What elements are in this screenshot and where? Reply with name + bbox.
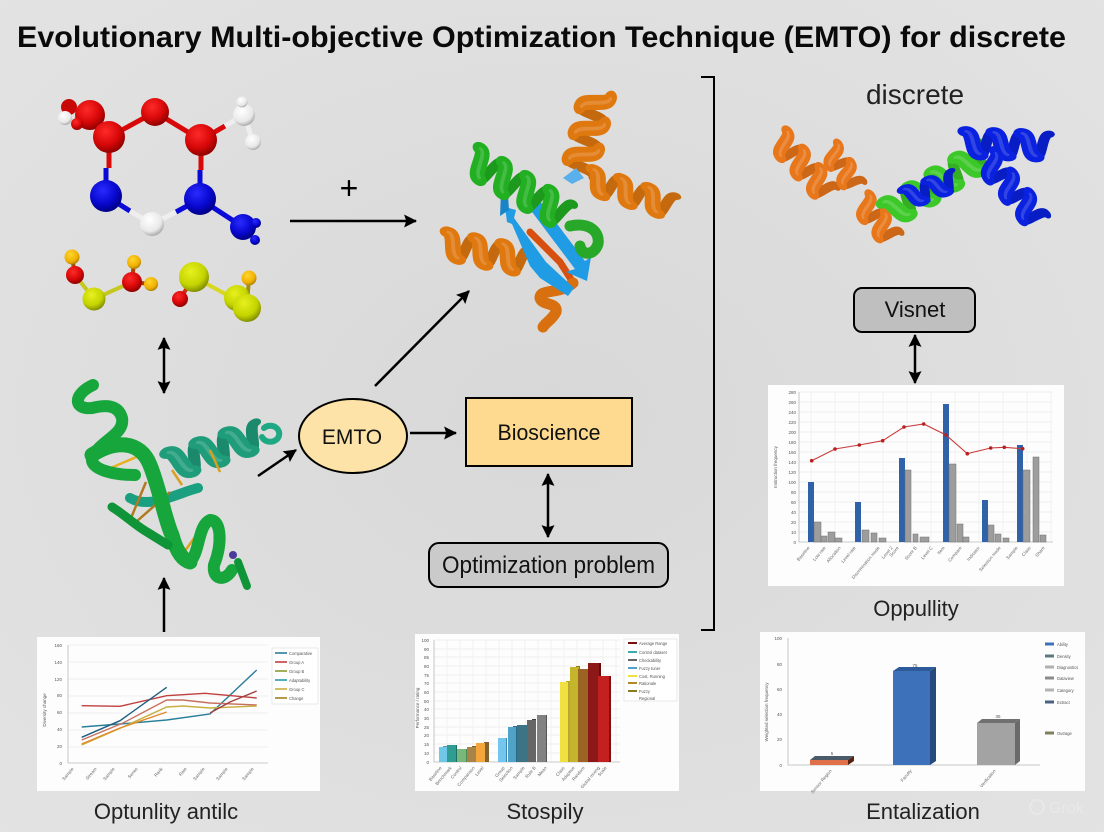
watermark: Grok (1030, 800, 1085, 817)
x axis labels: Item (936, 545, 946, 555)
legend: Outrage (1057, 731, 1073, 736)
bar: orange (810, 751, 854, 765)
y axis labels: 70 (424, 681, 429, 686)
x axis labels: Allocation (825, 545, 842, 564)
legend: Regional (639, 696, 655, 701)
y axis labels: 260 (788, 400, 796, 405)
panel: bar and line chart (768, 385, 1064, 586)
x axis labels: Score B (904, 545, 918, 561)
small molecule: yellow red pair (64, 250, 261, 322)
y axis labels: 60 (791, 500, 796, 505)
arrow: dna to EMTO (258, 450, 296, 476)
x axis labels (428, 765, 608, 790)
y axis labels: 75 (424, 673, 429, 678)
legend: Fuzzy (639, 689, 651, 694)
green helix end loop (570, 225, 598, 253)
double arrow: molecules to dna (163, 338, 165, 393)
EMTO node: EMTO (322, 426, 382, 449)
y axis labels: 120 (788, 470, 796, 475)
orange helix three (854, 195, 901, 245)
y axis labels: 90 (424, 647, 429, 652)
y axis labels: 10 (791, 530, 796, 535)
orange helix right (587, 169, 676, 217)
x axis labels: Control (450, 765, 463, 780)
y axis labels (788, 390, 796, 545)
x axis labels: Level (474, 765, 485, 777)
x axis labels: Sample (1005, 545, 1019, 560)
x axis labels: Faculty (900, 768, 913, 783)
caption: Stospily: Stospily (506, 799, 584, 824)
x axis labels: Class (1021, 545, 1032, 557)
plus sign: + (340, 170, 358, 206)
bioscience box (466, 398, 632, 466)
legend: Adaptability (289, 678, 311, 683)
blue arrow strands (500, 168, 591, 296)
x axis labels: Class (555, 765, 566, 777)
legend: Comparative (289, 651, 313, 656)
legend: Fuzzy tuner (639, 666, 661, 671)
y axis labels: 20 (57, 744, 62, 749)
bar: blue (893, 663, 936, 765)
panel: line chart (37, 637, 320, 791)
x axis labels: Level rate (840, 545, 857, 564)
y axis labels: 40 (791, 510, 796, 515)
EMTO node (299, 399, 407, 473)
series lines (82, 670, 257, 745)
legend: Group A (289, 660, 304, 665)
x axis labels: Group (494, 765, 506, 778)
x axis labels: Score (888, 545, 900, 558)
legend: Dataview (1057, 676, 1074, 681)
y axis labels: 180 (788, 440, 796, 445)
panel: 3D three-bar chart (760, 632, 1085, 794)
x axis labels: Baseline (428, 765, 443, 782)
legend: Extract (1057, 700, 1071, 705)
x axis labels: Sensor Region (810, 768, 833, 794)
x axis labels: Low rate (812, 545, 827, 562)
y axis labels: 85 (424, 655, 429, 660)
y axis labels: 100 (774, 636, 782, 641)
bar: orange: 5 (831, 751, 834, 756)
y axis labels: 60 (777, 687, 782, 692)
legend: Checkability (639, 658, 662, 663)
legend: Category (1057, 688, 1075, 693)
y axis labels (774, 636, 782, 768)
green helix (466, 148, 573, 228)
y axis labels: 20 (424, 733, 429, 738)
y axis labels: 120 (54, 677, 62, 682)
y axis labels: 240 (788, 410, 796, 415)
y axis labels: 15 (424, 742, 429, 747)
blue helix top (965, 131, 1049, 158)
orange helix top right (565, 92, 611, 176)
blue helix middle (904, 171, 957, 207)
x axis labels: Series (127, 766, 139, 779)
legend: Group B (289, 669, 305, 674)
optimization problem box: Optimization problem (442, 552, 655, 579)
blue helix bottom (978, 153, 1047, 228)
legend (272, 648, 318, 704)
bioscience box: Bioscience (498, 420, 600, 445)
x axis labels: Random (571, 765, 586, 782)
legend: Control dataset (639, 650, 668, 655)
x axis labels: Sample (102, 766, 116, 781)
y axis labels: 80 (791, 490, 796, 495)
legend: Average Range (639, 641, 668, 646)
watermark: Grok: Grok (1049, 800, 1085, 817)
base pair rungs (106, 450, 220, 555)
x axis labels: Selection (498, 765, 514, 783)
panel: grouped 3D bar chart (415, 634, 679, 791)
x axis labels (61, 766, 255, 781)
y axis labels: 80 (424, 664, 429, 669)
legend (624, 639, 677, 701)
y axis labels: 0 (793, 540, 796, 545)
y axis labels: 80 (57, 693, 62, 698)
y axis labels: 20 (791, 520, 796, 525)
x axis labels (796, 545, 1046, 580)
x axis labels: Adaptive (561, 765, 576, 782)
x axis labels: Mean (537, 765, 548, 777)
red trend line (812, 424, 1023, 461)
x axis labels: Compare (947, 545, 963, 563)
y axis labels: 40 (424, 707, 429, 712)
y axis labels: 140 (788, 460, 796, 465)
y axis title: Weighted selection frequency (764, 682, 769, 741)
y axis labels: 20 (777, 737, 782, 742)
y axis title: Performance / rating (415, 687, 420, 728)
double arrow: visnet to chart (914, 335, 916, 383)
bar: blue: 75 (912, 663, 918, 668)
x axis labels: Discrimination mode (851, 545, 881, 580)
x axis labels: Rate (178, 766, 188, 777)
orange helix left (442, 232, 530, 273)
orange helix one (771, 132, 837, 201)
y axis labels: 10 (424, 751, 429, 756)
x axis labels: Sample (192, 766, 206, 781)
y axis labels: 220 (788, 420, 796, 425)
y axis labels: 40 (57, 727, 62, 732)
arrow: up to dna from line chart (163, 578, 165, 632)
legend: Ability (1057, 642, 1069, 647)
x axis labels: Stream (85, 766, 98, 781)
x axis labels: Level 2 (881, 545, 894, 560)
legend: Cost, Running (639, 674, 666, 679)
legend: Density (1057, 654, 1072, 659)
y axis labels: 160 (54, 643, 62, 648)
x axis labels: Indicator (966, 545, 981, 562)
legend: Diagnostics (1057, 665, 1078, 670)
x axis labels: Share (1034, 545, 1046, 558)
caption: Entalization: Entalization (866, 799, 980, 824)
bar group 3 (560, 663, 611, 762)
y axis labels: 160 (788, 450, 796, 455)
legend: Group C (289, 687, 305, 692)
arrow: EMTO to bioscience (410, 432, 456, 434)
protein chain: orange green blue (771, 131, 1049, 245)
orange helix two (822, 144, 864, 192)
y axis labels: 40 (777, 712, 782, 717)
x axis labels: Scale (597, 765, 608, 777)
y axis labels: 0 (59, 761, 62, 766)
caption: Oppullity: Oppullity (873, 596, 959, 621)
small molecule: red blue ring (58, 96, 261, 245)
y axis labels: 140 (54, 660, 62, 665)
legend (1045, 642, 1078, 736)
teal helix (168, 423, 264, 477)
x axis labels: Sample (215, 766, 229, 781)
bar group 1 (439, 742, 489, 762)
y axis labels: 60 (57, 710, 62, 715)
dna protein helix (78, 385, 279, 586)
y axis labels (54, 643, 62, 766)
x axis labels: Global mixing (579, 765, 601, 790)
bar: gray (977, 714, 1020, 765)
bar group 2 (498, 715, 547, 762)
y axis title: Instruction frequency (773, 445, 778, 488)
y axis labels: 200 (788, 430, 796, 435)
arrow: EMTO to protein (375, 291, 469, 386)
green ribbon (78, 385, 247, 586)
legend: Change (289, 696, 304, 701)
x axis labels: Selection mode (978, 545, 1002, 572)
x axis labels: Sample (61, 766, 75, 781)
y axis labels: 30 (424, 716, 429, 721)
protein structure: orange green blue (442, 92, 676, 327)
y axis labels: 100 (788, 480, 796, 485)
double arrow: bioscience to optimization problem (547, 474, 549, 537)
blue bars (808, 404, 1023, 542)
x axis labels: Verification (979, 768, 997, 789)
x axis labels: Level C (920, 545, 934, 560)
heading: discrete: discrete (866, 79, 964, 110)
x axis labels: Comparison (456, 765, 476, 787)
bracket divider (701, 77, 714, 630)
title: Evolutionary Multi-objective Optimization Technique (EMTO) for discrete (17, 21, 1066, 54)
legend: Rationale (639, 681, 657, 686)
y axis labels: 25 (424, 725, 429, 730)
green helix (883, 143, 992, 224)
y axis labels: 80 (777, 662, 782, 667)
arrow: molecules to protein (290, 220, 416, 222)
orange lower coil (530, 232, 574, 327)
x axis labels (810, 768, 997, 794)
y axis labels: 60 (424, 690, 429, 695)
x axis labels: Rank (153, 766, 164, 778)
y axis labels: 0 (779, 763, 782, 768)
y axis labels: 100 (421, 638, 429, 643)
y axis labels: 50 (424, 699, 429, 704)
y axis title: Diversity change (42, 693, 47, 727)
gray bars (814, 457, 1046, 542)
y axis labels (421, 638, 429, 765)
caption: Optunlity antilc: Optunlity antilc (94, 799, 238, 824)
optimization problem box (429, 543, 668, 587)
x axis labels: Benchmark (434, 765, 453, 786)
y axis labels: 280 (788, 390, 796, 395)
x axis labels: Baseline (796, 545, 811, 562)
bar: gray: 35 (995, 714, 1001, 719)
visnet box: Visnet (885, 297, 945, 322)
y axis labels: 0 (426, 760, 429, 765)
x axis labels: Sample (512, 765, 526, 780)
x axis labels: Sample (241, 766, 255, 781)
x axis labels: Rule B (524, 765, 537, 779)
visnet box (854, 288, 975, 332)
